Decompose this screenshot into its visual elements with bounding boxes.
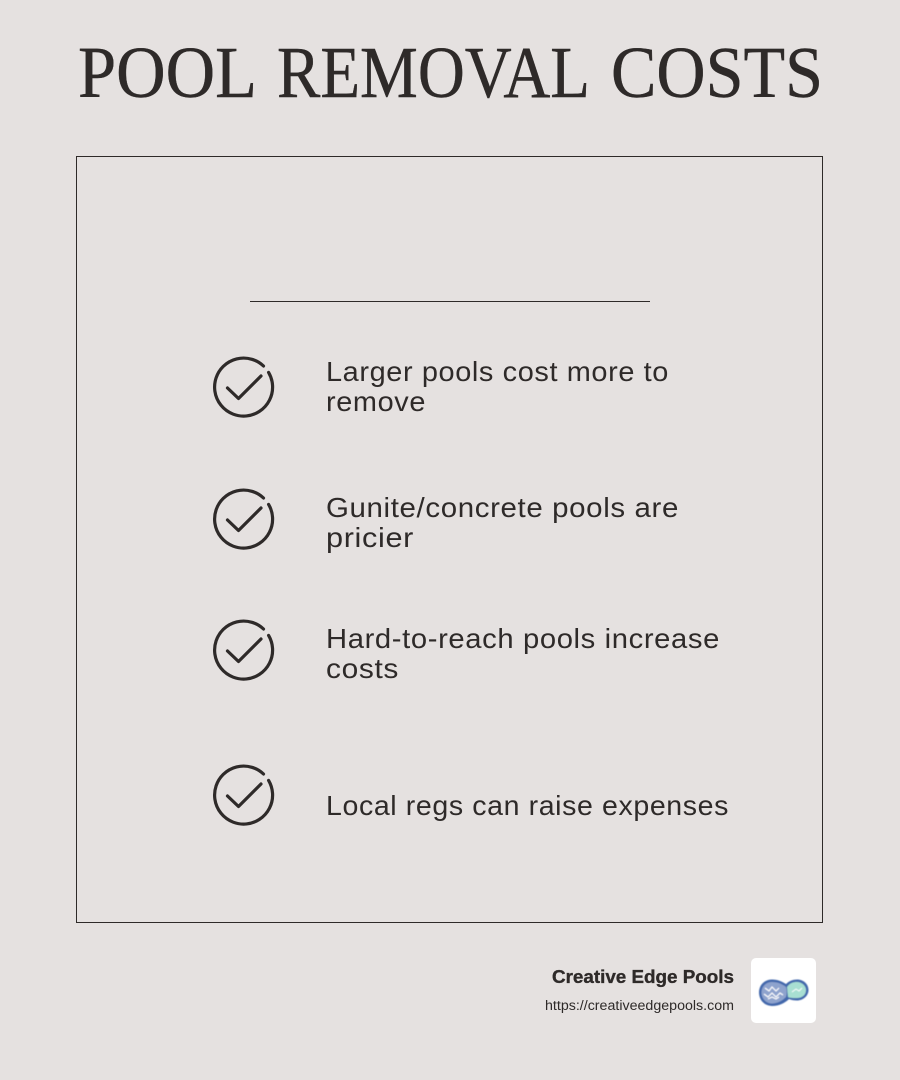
panel border bbox=[76, 156, 822, 922]
icon: check circle bbox=[215, 490, 273, 548]
divider line bbox=[250, 301, 650, 302]
item text bbox=[326, 623, 720, 684]
icon: check circle bbox=[215, 621, 273, 679]
brand url: https://creativeedgepools.com bbox=[545, 998, 734, 1013]
footer bbox=[545, 958, 816, 1023]
item text bbox=[326, 356, 669, 417]
title: REMOVAL bbox=[277, 32, 590, 113]
title: POOL bbox=[78, 32, 257, 113]
item: hard-to-reach bbox=[215, 621, 720, 684]
item text: costs bbox=[326, 653, 399, 684]
item text: pricier bbox=[326, 522, 414, 553]
brand name: Creative Edge Pools bbox=[552, 966, 734, 987]
item: larger pools bbox=[215, 356, 669, 417]
logo bbox=[751, 958, 816, 1023]
item text: Gunite/concrete pools are bbox=[326, 492, 679, 523]
item text: remove bbox=[326, 386, 426, 417]
icon: check circle bbox=[215, 358, 273, 416]
item text: Hard-to-reach pools increase bbox=[326, 623, 720, 654]
icon: check circle bbox=[215, 766, 273, 824]
item: gunite/concrete bbox=[215, 490, 679, 553]
title bbox=[78, 32, 823, 113]
item text bbox=[326, 492, 679, 553]
item text: Local regs can raise expenses bbox=[326, 790, 729, 821]
panel: cost factors bbox=[76, 156, 822, 922]
item: local regs bbox=[215, 766, 729, 824]
title: COSTS bbox=[611, 32, 823, 113]
item text: Larger pools cost more to bbox=[326, 356, 669, 387]
